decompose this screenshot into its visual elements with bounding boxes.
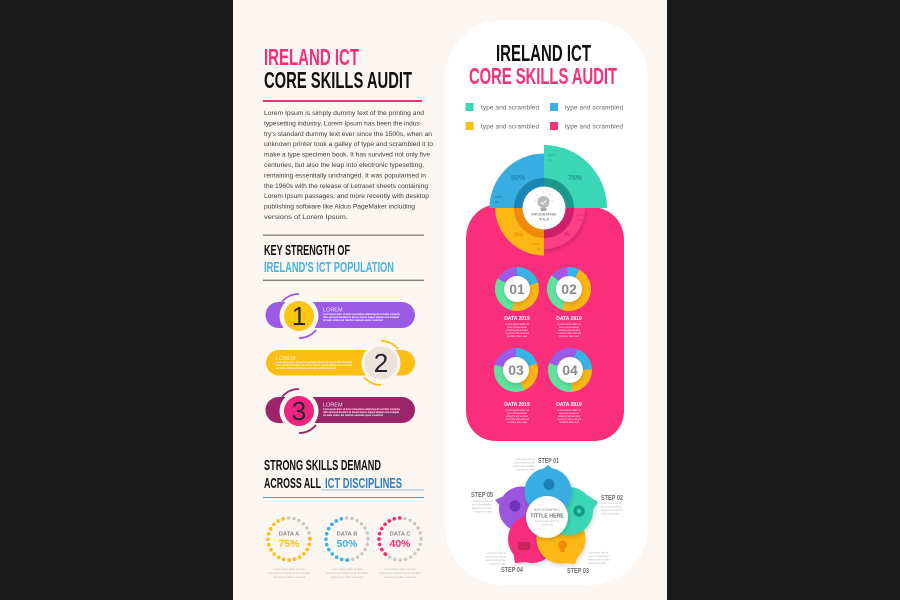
- chart: donut 01: tincidunt diam sed: [507, 334, 527, 338]
- left column title: CORE SKILLS AUDIT: [264, 67, 412, 93]
- chart: quadrant radial pie: TITLE: [539, 218, 550, 222]
- ribbon 1: LOREM: [323, 308, 343, 314]
- dot gauge: data B 50%: 50%: [336, 538, 358, 550]
- step 01 label: Lorem ipsum dolor sit: [515, 457, 535, 461]
- chart: quadrant radial pie: 01: [548, 158, 552, 162]
- intro paragraph: the 1960s with the release of Letraset sheets containing: [264, 183, 428, 190]
- ribbon 3: Lorem ipsum dolor sit amet consectetuer adipiscing elit sed diam nonummy: [323, 407, 400, 411]
- ribbon 1: [266, 294, 415, 338]
- step 04 label: nonummy nibh: [489, 562, 506, 566]
- ribbon 1: Lorem ipsum dolor sit amet consectetuer adipiscing elit sed diam nonummy: [323, 312, 400, 316]
- chart: donut 01: adipiscing elit sed diam: [506, 328, 528, 332]
- icon: light bulb: [534, 192, 553, 211]
- ribbon 2: 2: [374, 348, 388, 378]
- intro paragraph: unknown printer took a galley of type and scrambled it to: [264, 141, 433, 148]
- chart: quadrant radial pie: 03: [537, 247, 541, 251]
- step 02 label: nonummy nibh: [601, 512, 619, 516]
- step 01 label: adipiscing elit sed diam: [513, 464, 535, 468]
- dot gauge: data B 50%: DATA B: [337, 532, 357, 538]
- right column title: [469, 40, 617, 89]
- chart: donut 03: adipiscing elit sed diam: [506, 414, 528, 418]
- ribbon 3: 3: [292, 396, 306, 426]
- chart: donut 03: [494, 348, 538, 424]
- step 02 label: Lorem ipsum dolor sit: [601, 501, 621, 505]
- chart: quadrant radial pie: 02: [495, 200, 499, 204]
- petal: step 03: [536, 514, 586, 564]
- chart: donut 04: adipiscing elit sed diam: [558, 414, 580, 418]
- chart: quadrant radial pie: [490, 145, 607, 256]
- heading: strong skills demand: ICT DISCIPLINES: [325, 475, 402, 492]
- chart: quadrant radial pie: INFOGRAPHIC: [531, 212, 557, 216]
- step 04 label: Lorem ipsum dolor sit: [487, 551, 506, 555]
- chart: five-step petal diagram: Lorem ipsum dolor sit: [535, 519, 559, 523]
- step 03 label: adipiscing elit sed diam: [588, 558, 610, 562]
- chart: donut 04: amet consectetuer: [559, 411, 579, 415]
- right column title: CORE SKILLS AUDIT: [469, 63, 617, 89]
- chart: quadrant radial pie: 04: [579, 218, 583, 222]
- chart: donut 03: nonummy nibh euismod: [505, 417, 529, 421]
- panel: right white column: [445, 20, 648, 585]
- dot gauge: data C 40%: nonummy nibh euismod: [384, 575, 416, 579]
- chart: quadrant radial pie: DATA: [495, 195, 503, 199]
- heading: strong skills demand: [263, 457, 424, 498]
- dot gauge: data A 75%: 75%: [278, 538, 300, 550]
- chart: quadrant radial pie: DATA: [548, 153, 556, 157]
- right column title: IRELAND ICT: [496, 40, 591, 66]
- legend: type and scrambled: [565, 104, 623, 112]
- intro paragraph: make a type specimen book. It has survived not only five: [264, 152, 430, 159]
- dot gauge: data B 50%: nonummy nibh euismod: [331, 575, 363, 579]
- chart: donut 01: amet consectetuer: [507, 325, 527, 329]
- chart: quadrant radial pie: DATA: [532, 242, 540, 246]
- ribbon 1: nibh euismod tincidunt ut laoreet dolore magna aliquam erat volutpat: [323, 315, 399, 319]
- chart: five-step petal diagram: amet sed: [541, 522, 553, 526]
- chart: donut 04: Lorem ipsum dolor sit: [557, 408, 581, 412]
- intro paragraph: typesetting industry. Lorem Ipsum has been the indus-: [264, 120, 422, 127]
- intro paragraph: [264, 110, 433, 221]
- left column title: IRELAND ICT: [264, 44, 359, 70]
- intro paragraph: versions of Lorem Ipsum.: [264, 214, 348, 221]
- step 03 label: Lorem ipsum dolor sit: [588, 550, 608, 554]
- dot gauge: data C 40%: DATA C: [390, 532, 411, 538]
- chart: donut 01: 01: [509, 281, 525, 297]
- chart: donut 04: DATA 2019: [556, 402, 582, 408]
- ribbon 2: LOREM: [276, 356, 296, 362]
- dot gauge: data A 75%: consectetuer adipiscing elit sed diam: [268, 571, 310, 575]
- chart: donut 01: [493, 265, 541, 338]
- chart: donut 04: tincidunt diam sed: [559, 420, 579, 424]
- heading: strong skills demand: ACROSS ALL: [264, 475, 321, 492]
- chart: quadrant radial pie: 7%: [563, 232, 571, 238]
- petal: step 02: [545, 487, 598, 535]
- step 03 label: STEP 03: [567, 568, 589, 575]
- ribbon 2: Lorem ipsum dolor sit amet consectetuer adipiscing elit sed diam nonummy: [276, 360, 352, 364]
- chart: donut 03: tincidunt diam sed: [507, 420, 527, 424]
- chart: donut 03: DATA 2019: [504, 402, 530, 408]
- ribbon 2: ut wisi enim ad minim veniam quis nostrud: [276, 366, 336, 370]
- ribbon 3: ut wisi enim ad minim veniam quis nostrud: [323, 413, 383, 417]
- chart: donut 02: nonummy nibh euismod: [557, 331, 581, 335]
- petal: step 01: [524, 465, 572, 515]
- legend: type and scrambled: [481, 124, 539, 130]
- dot gauge: data C 40%: consectetuer adipiscing elit sed diam: [379, 571, 421, 575]
- panel: pink background block: [466, 204, 624, 441]
- step 03 label: [567, 550, 610, 575]
- dot gauge: data B 50%: consectetuer adipiscing elit sed diam: [326, 571, 368, 575]
- chart: donut 04: 04: [562, 362, 578, 378]
- step 05 label: nonummy nibh: [475, 510, 492, 514]
- chart: donut 02: tincidunt diam sed: [559, 334, 579, 338]
- dot gauge: data A 75%: Lorem ipsum dolor sit amet: [273, 567, 305, 571]
- chart: quadrant radial pie: 50%: [511, 175, 526, 182]
- ribbon 2: [266, 341, 415, 385]
- heading: key strength: [263, 234, 424, 281]
- chart: donut 02: amet consectetuer: [559, 325, 579, 329]
- chart: donut 02: DATA 2019: [556, 316, 582, 322]
- step 02 label: amet consectetuer: [601, 504, 622, 508]
- step 03 label: amet consectetuer: [588, 554, 609, 558]
- chart: five-step petal diagram: TITTLE HERE: [530, 514, 564, 520]
- dot gauge: data A 75%: nonummy nibh euismod: [273, 575, 305, 579]
- chart: five-step petal diagram: INFOGRAPHIC: [534, 508, 560, 512]
- chart: donut 02: 02: [561, 281, 577, 297]
- chart: donut 03: Lorem ipsum dolor sit: [505, 408, 529, 412]
- ribbon 1: 1: [292, 301, 306, 331]
- chart: donut 01: nonummy nibh euismod: [505, 331, 529, 335]
- step 04 label: [486, 551, 523, 574]
- intro paragraph: Lorem Ipsum passages, and more recently with desktop: [264, 193, 429, 200]
- chart: donut 03: 03: [508, 362, 524, 378]
- step 02 label: [601, 495, 623, 516]
- chart: donut 02: adipiscing elit sed diam: [558, 328, 580, 332]
- step 05 label: [471, 492, 493, 514]
- ribbon 1: ut wisi enim ad minim veniam quis nostrud: [323, 318, 383, 322]
- intro paragraph: publishing software like Aldus PageMaker including: [264, 204, 415, 211]
- heading: key strength: KEY STRENGTH OF: [264, 242, 350, 259]
- step 05 label: amet consectetuer: [472, 502, 492, 506]
- ribbon 2: nibh euismod tincidunt ut laoreet dolore magna aliquam erat volutpat: [276, 363, 352, 367]
- step 04 label: amet consectetuer: [486, 554, 506, 558]
- chart: donut 02: [544, 264, 594, 338]
- chart: quadrant radial pie: 75%: [568, 175, 583, 182]
- petal: step 05: [495, 486, 544, 532]
- ribbon 3: [266, 389, 415, 433]
- step 05 label: adipiscing elit sed diam: [472, 506, 492, 510]
- left column title: [263, 44, 422, 102]
- dot gauge: data C 40%: 40%: [389, 538, 411, 550]
- center title circle: [526, 496, 568, 538]
- ribbon 3: LOREM: [323, 402, 343, 408]
- chart: five-step petal diagram: [495, 465, 598, 564]
- step 05 label: Lorem ipsum dolor sit: [473, 499, 492, 503]
- chart: donut 04: nonummy nibh euismod: [557, 417, 581, 421]
- legend: type and scrambled: [481, 104, 539, 112]
- intro paragraph: remaining essentially unchanged. It was popularised in: [264, 172, 426, 179]
- chart: donut 01: DATA 2019: [504, 316, 530, 322]
- intro paragraph: centuries, but also the leap into electronic typesetting,: [264, 162, 424, 169]
- dot gauge: data B 50%: [326, 518, 368, 579]
- step 01 label: amet consectetuer: [514, 460, 535, 464]
- heading: key strength: IRELAND'S ICT POPULATION: [264, 259, 394, 276]
- chart: donut 01: Lorem ipsum dolor sit: [505, 322, 529, 326]
- step 04 label: adipiscing elit sed diam: [486, 558, 506, 562]
- step 05 label: STEP 05: [471, 492, 493, 499]
- page background: [233, 0, 667, 600]
- petal: step 04: [508, 515, 556, 563]
- heading: strong skills demand: STRONG SKILLS DEMAND: [264, 457, 381, 474]
- chart: donut 03: amet consectetuer: [507, 411, 527, 415]
- intro paragraph: try's standard dummy text ever since the 1500s, when an: [264, 131, 432, 138]
- dot gauge: data B 50%: Lorem ipsum dolor sit amet: [331, 567, 363, 571]
- dot gauge: data A 75%: DATA A: [279, 532, 300, 538]
- chart: donut 04: [548, 348, 592, 424]
- chart: quadrant radial pie: DATA: [576, 213, 584, 217]
- step 01 label: nonummy nibh: [516, 468, 535, 472]
- legend: [466, 103, 623, 130]
- step 02 label: STEP 02: [601, 495, 623, 502]
- step 02 label: adipiscing elit sed diam: [601, 508, 623, 512]
- step 04 label: STEP 04: [501, 567, 523, 574]
- dot gauge: data C 40%: [370, 509, 430, 579]
- dot gauge: data A 75%: [268, 518, 310, 579]
- chart: donut 02: Lorem ipsum dolor sit: [557, 322, 581, 326]
- ribbon 3: nibh euismod tincidunt ut laoreet dolore magna aliquam erat volutpat: [323, 410, 399, 414]
- step 01 label: STEP 01: [538, 458, 559, 465]
- legend: type and scrambled: [565, 124, 623, 130]
- dot gauge: data C 40%: Lorem ipsum dolor sit amet: [384, 567, 416, 571]
- intro paragraph: Lorem Ipsum is simply dummy text of the printing and: [264, 110, 424, 117]
- chart: quadrant radial pie: 20%: [513, 232, 524, 238]
- step 03 label: nonummy nibh: [588, 561, 606, 565]
- step 01 label: [513, 457, 559, 472]
